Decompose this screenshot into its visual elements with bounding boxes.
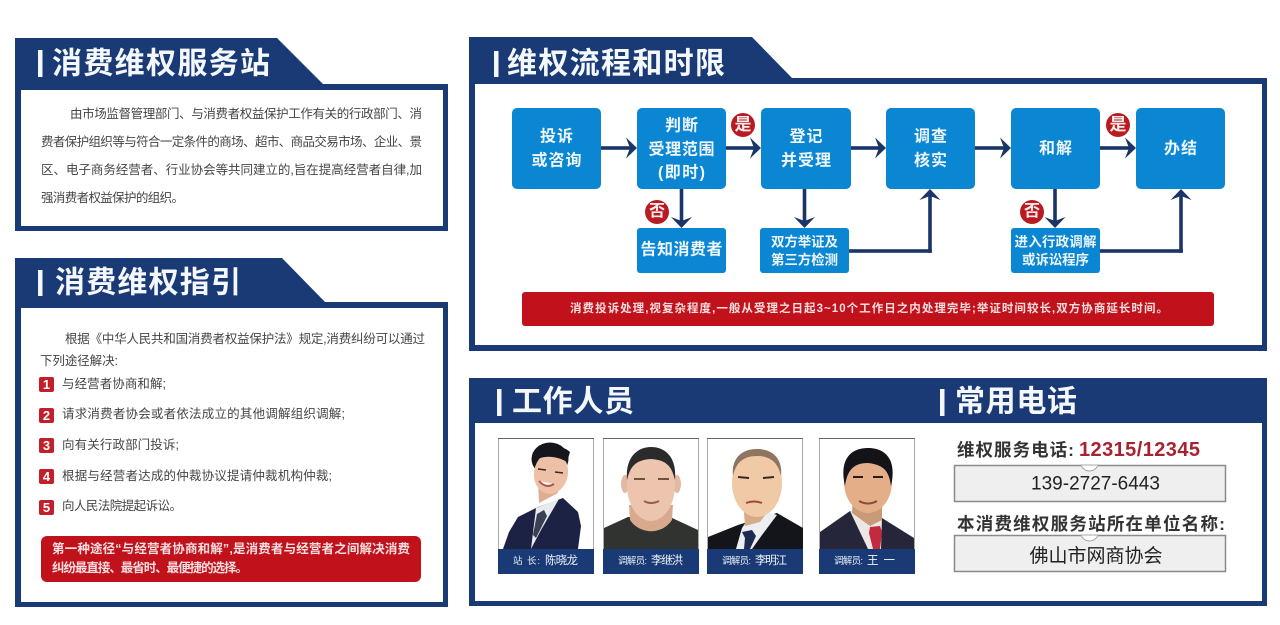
staff card: Li Mingjiang: 李明江	[755, 553, 788, 567]
heading: consumer rights guide: 消费维权指引	[55, 266, 241, 300]
badge: yes 1	[731, 113, 755, 137]
badge: no 2	[1020, 200, 1044, 224]
list: five resolution routes: 3	[43, 438, 50, 453]
staff card: Wang Yi: 调解员:	[834, 555, 863, 567]
text block: rights service phone: 维权服务电话:	[957, 440, 1074, 460]
flow box: notify consumer	[637, 228, 726, 273]
text block: guide intro: 根据《中华人民共和国消费者权益保护法》规定,消费纠纷可以通过	[65, 331, 425, 346]
text block: guide intro	[40, 331, 425, 368]
text block: host organisation: 佛山市网商协会	[1030, 545, 1162, 567]
list: five resolution routes: 4	[43, 469, 51, 484]
staff card: Chen Xiaolong: 陈晓龙	[545, 553, 578, 567]
badge: no 1: 否	[649, 203, 665, 220]
arrows: flow connectors	[601, 138, 1192, 253]
panel: staff and phone numbers	[469, 378, 1267, 606]
staff card: Li Mingjiang: 调解员:	[722, 555, 751, 567]
staff card: Li Jihong: 李继洪	[651, 553, 684, 567]
list: five resolution routes: 向有关行政部门投诉;	[62, 437, 179, 452]
staff card: Chen Xiaolong: 站 长:	[513, 555, 540, 567]
panel: consumer rights station	[15, 38, 448, 231]
text block: station description	[41, 106, 422, 205]
flow box: judge scope	[637, 108, 726, 189]
text block: guide intro: 下列途径解决:	[40, 353, 118, 368]
flow box: judge scope: 判断	[665, 116, 698, 134]
flow box: register	[761, 108, 851, 189]
flow box: settle: 和解	[1039, 140, 1072, 158]
badge: yes 1: 是	[734, 115, 752, 134]
callout: first route advice	[41, 536, 421, 582]
staff card: Li Mingjiang	[707, 438, 803, 574]
text block: rights service phone: 139-2727-6443	[1031, 474, 1160, 494]
heading: phone numbers: 常用电话	[955, 386, 1077, 418]
flow box: judge scope: 受理范围	[648, 140, 714, 158]
callout: time limit note: 消费投诉处理,视复杂程度,一般从受理之日起3~10个工作日之内处理完毕;举证时间较长,双方协商延长时间。	[570, 301, 1168, 315]
badge: yes 2: 是	[1110, 115, 1126, 134]
flow box: complaint: 或咨询	[532, 150, 582, 170]
flow box: investigate: 核实	[914, 150, 947, 170]
flow box: register: 并受理	[781, 150, 831, 170]
badge: no 1	[645, 200, 669, 224]
staff card: Li Jihong: 调解员:	[618, 555, 647, 567]
badge: yes 2	[1106, 113, 1130, 137]
flow box: mediation or litigation	[1011, 228, 1100, 273]
text block: host organisation	[954, 514, 1226, 572]
panel: process and time limits	[469, 37, 1267, 351]
list: five resolution routes: 1	[43, 377, 50, 392]
heading: staff: 工作人员	[512, 386, 634, 418]
badge: no 2: 否	[1024, 203, 1040, 220]
staff card: Wang Yi	[819, 438, 915, 574]
list: five resolution routes: 2	[43, 408, 50, 423]
list: five resolution routes: 根据与经营者达成的仲裁协议提请仲裁机构仲裁;	[62, 468, 332, 483]
flow box: notify consumer: 告知消费者	[640, 240, 722, 258]
text block: station description: 费者保护组织等与符合一定条件的商场、超市、商品交易市场、企业、景	[41, 134, 422, 149]
text block: station description: 由市场监督管理部门、与消费者权益保护工作有关的行政部门、消	[70, 106, 422, 121]
list: five resolution routes: 请求消费者协会或者依法成立的其他调解组织调解;	[62, 406, 345, 421]
flow box: complaint	[512, 108, 601, 189]
flow box: complaint: 投诉	[540, 126, 573, 146]
text block: host organisation: 本消费维权服务站所在单位名称:	[957, 514, 1225, 534]
staff card: Chen Xiaolong	[498, 438, 594, 574]
flow box: evidence and testing: 第三方检测	[771, 252, 838, 268]
flow box: mediation or litigation: 进入行政调解	[1014, 234, 1097, 250]
callout: first route advice: 纠纷最直接、最省时、最便捷的选择。	[52, 560, 248, 575]
staff card: Wang Yi: 王 一	[867, 555, 896, 567]
flow box: register: 登记	[790, 126, 822, 146]
callout: first route advice: 第一种途径“与经营者协商和解”,是消费者与经营者之间解决消费	[52, 541, 410, 556]
flow box: closed: 办结	[1164, 140, 1197, 158]
flow box: investigate: 调查	[914, 128, 947, 146]
text block: rights service phone: 12315/12345	[1079, 439, 1200, 461]
list: five resolution routes: 5	[43, 500, 50, 515]
heading: consumer rights station: 消费维权服务站	[52, 48, 270, 80]
heading: process and time limits: 维权流程和时限	[507, 48, 725, 80]
callout: time limit note	[522, 292, 1214, 326]
text block: rights service phone	[954, 439, 1226, 502]
text block: station description: 区、电子商务经营者、行业协会等共同建立的,旨在提高经营者自律,加	[41, 162, 422, 177]
flow box: investigate	[886, 108, 975, 189]
flow box: evidence and testing	[760, 228, 849, 273]
flow box: evidence and testing: 双方举证及	[771, 234, 838, 250]
flow box: closed	[1136, 108, 1225, 189]
list: five resolution routes	[39, 376, 345, 515]
staff card: Li Jihong	[603, 438, 699, 574]
flow box: settle	[1011, 108, 1100, 189]
list: five resolution routes: 向人民法院提起诉讼。	[62, 498, 182, 513]
list: five resolution routes: 与经营者协商和解;	[62, 376, 166, 391]
flow box: mediation or litigation: 或诉讼程序	[1022, 252, 1089, 268]
flow box: judge scope: (即时)	[658, 164, 705, 182]
panel: consumer rights guide	[15, 258, 448, 607]
text block: station description: 强消费者权益保护的组织。	[41, 190, 184, 205]
